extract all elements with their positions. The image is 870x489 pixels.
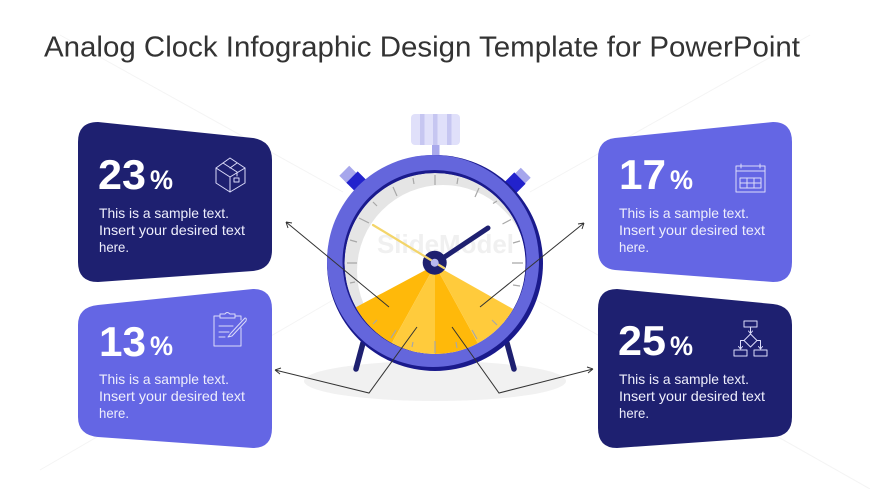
arrow: to 25% bbox=[452, 327, 593, 393]
value bbox=[618, 317, 693, 364]
centre hub bbox=[423, 251, 447, 275]
text block: This is a sample text. bbox=[619, 371, 749, 387]
arrows bbox=[275, 222, 593, 393]
text block: here. bbox=[99, 405, 129, 421]
icon: calendar bbox=[736, 164, 765, 192]
text block: Insert your desired text bbox=[619, 222, 765, 238]
clock ticks bbox=[347, 175, 523, 353]
value: % bbox=[670, 331, 693, 361]
title: Analog Clock Infographic Design Template for PowerPoint bbox=[44, 32, 800, 64]
value: % bbox=[670, 165, 693, 195]
panel: 23% bbox=[78, 122, 272, 282]
text block: here. bbox=[619, 239, 649, 255]
clock legs bbox=[356, 343, 514, 369]
panel: 25% bbox=[598, 289, 792, 448]
pie wedges bbox=[356, 270, 514, 354]
value: 23 bbox=[98, 151, 146, 198]
icon: clipboard bbox=[214, 312, 246, 346]
value bbox=[99, 318, 173, 365]
icon: flowchart bbox=[734, 321, 767, 356]
text block bbox=[99, 371, 245, 421]
value bbox=[619, 151, 693, 198]
value: % bbox=[150, 331, 173, 361]
value: 13 bbox=[99, 318, 146, 365]
text block: here. bbox=[99, 239, 129, 255]
text block bbox=[619, 205, 765, 255]
text block: This is a sample text. bbox=[99, 371, 229, 387]
arrow: to 13% bbox=[275, 327, 417, 393]
crown bbox=[411, 114, 460, 157]
side buttons bbox=[339, 166, 531, 194]
panel: 13% bbox=[78, 289, 272, 448]
text block: This is a sample text. bbox=[99, 205, 229, 221]
text block: Insert your desired text bbox=[99, 222, 245, 238]
text block bbox=[619, 371, 765, 421]
second hand bbox=[373, 225, 444, 268]
watermark: SlideModel bbox=[377, 229, 514, 259]
minute hand bbox=[440, 228, 488, 260]
text block: Insert your desired text bbox=[619, 388, 765, 404]
value: % bbox=[150, 165, 173, 195]
clock face bbox=[344, 173, 526, 354]
arrow: to 17% bbox=[480, 223, 584, 307]
value: 17 bbox=[619, 151, 666, 198]
clock illustration bbox=[304, 114, 566, 401]
ground shadow bbox=[304, 361, 566, 401]
hub cap bbox=[431, 259, 439, 267]
text block: Insert your desired text bbox=[99, 388, 245, 404]
arrow: to 23% bbox=[286, 222, 389, 307]
text block: This is a sample text. bbox=[619, 205, 749, 221]
clock ring bbox=[327, 155, 543, 371]
value: 25 bbox=[618, 317, 666, 364]
icon: box bbox=[216, 158, 245, 192]
panel: 17% bbox=[598, 122, 792, 282]
value bbox=[98, 151, 173, 198]
text block bbox=[99, 205, 245, 255]
text block: here. bbox=[619, 405, 649, 421]
